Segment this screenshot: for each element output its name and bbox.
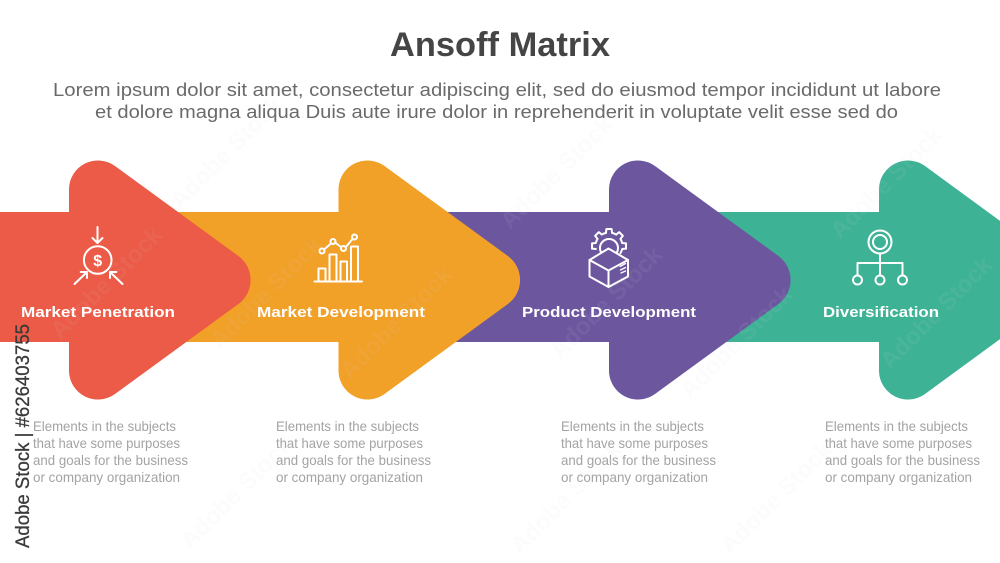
- icon: dollar with inward arrows: $: [93, 253, 102, 270]
- description 2: or company organization: [276, 469, 423, 485]
- description 4: and goals for the business: [825, 452, 980, 468]
- stock watermark pattern: [45, 91, 998, 559]
- description 2: and goals for the business: [276, 452, 431, 468]
- description 4: [825, 418, 980, 485]
- stock watermark pattern: Adobe Stock: [675, 281, 798, 404]
- arrow 3: Product Development (purple): [430, 160, 791, 400]
- icon: gear and box: [590, 229, 628, 287]
- stock watermark pattern: Adobe Stock: [175, 431, 298, 554]
- title: Ansoff Matrix: [390, 26, 610, 64]
- icon: dollar with inward arrows: [74, 227, 122, 284]
- description 2: that have some purposes: [276, 435, 423, 451]
- stock watermark pattern: Adobe Stock: [505, 436, 628, 559]
- description 1: Elements in the subjects: [33, 418, 176, 434]
- label: Diversification: Diversification: [823, 304, 939, 321]
- description 4: Elements in the subjects: [825, 418, 968, 434]
- stock watermark pattern: Adobe Stock: [875, 251, 998, 374]
- stock watermark pattern: Adobe Stock: [825, 121, 948, 244]
- description 3: and goals for the business: [561, 452, 716, 468]
- description 4: that have some purposes: [825, 435, 972, 451]
- icon: hierarchy network: [853, 230, 907, 284]
- description 2: [276, 418, 431, 485]
- intro paragraph: et dolore magna aliqua Duis aute irure dolor in reprehenderit in voluptate velit esse sed do: [95, 101, 898, 122]
- description 1: [33, 418, 188, 485]
- label: Product Development: Product Development: [522, 304, 696, 321]
- label: Market Penetration: Market Penetration: [21, 304, 175, 321]
- stock watermark pattern: Adobe Stock: [715, 436, 838, 559]
- stock watermark pattern: Adobe Stock: [205, 231, 328, 354]
- description 1: or company organization: [33, 469, 180, 485]
- intro paragraph: [53, 79, 941, 122]
- description 4: or company organization: [825, 469, 972, 485]
- description 3: [561, 418, 716, 485]
- description 2: Elements in the subjects: [276, 418, 419, 434]
- description 3: Elements in the subjects: [561, 418, 704, 434]
- stock id vertical text: Adobe Stock | #626403755: [13, 324, 34, 548]
- intro paragraph: Lorem ipsum dolor sit amet, consectetur adipiscing elit, sed do eiusmod tempor incididunt ut labore: [53, 79, 941, 100]
- stock watermark pattern: Adobe Stock: [45, 221, 168, 344]
- stock watermark pattern: Adobe Stock: [335, 261, 458, 384]
- description 3: or company organization: [561, 469, 708, 485]
- description 3: that have some purposes: [561, 435, 708, 451]
- stock watermark pattern: Adobe Stock: [545, 241, 668, 364]
- arrow 1: Market Penetration (red): [0, 160, 251, 400]
- label: Market Development: Market Development: [257, 304, 425, 321]
- stock watermark pattern: Adobe Stock: [495, 111, 618, 234]
- icon: bar chart with trend line: [314, 234, 362, 282]
- description 1: that have some purposes: [33, 435, 180, 451]
- description 1: and goals for the business: [33, 452, 188, 468]
- stock watermark pattern: Adobe Stock: [165, 91, 288, 214]
- arrow 2: Market Development (orange): [160, 160, 520, 400]
- arrow 4: Diversification (green): [700, 160, 1000, 400]
